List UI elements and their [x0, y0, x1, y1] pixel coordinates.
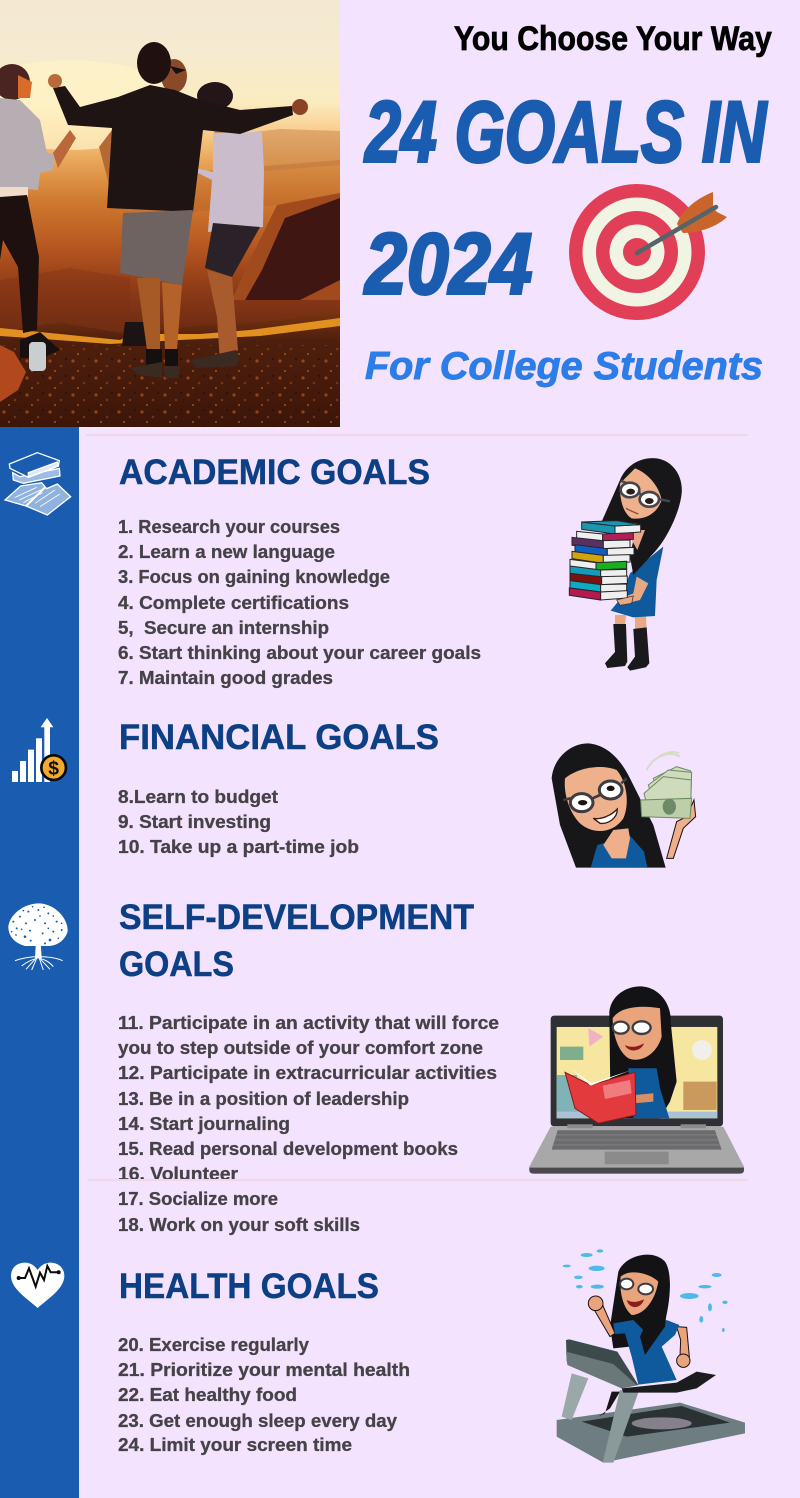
- divider: [86, 434, 748, 436]
- list: self-development goals: 18. Work on your soft skills: [118, 1215, 360, 1235]
- title block: [363, 19, 772, 388]
- list: academic goals: 3. Focus on gaining knowledge: [118, 567, 390, 587]
- list: self-development goals: you to step outside of your comfort zone: [118, 1038, 483, 1058]
- person: centre, dark jacket: [48, 42, 308, 378]
- panel: financial goals: [118, 718, 439, 857]
- arms: [593, 1305, 615, 1337]
- heading: self-development goals: SELF-DEVELOPMENT: [119, 898, 474, 937]
- orange bag: [0, 345, 26, 402]
- list: financial goals: [118, 787, 359, 857]
- list: financial goals: 8.Learn to budget: [118, 787, 278, 807]
- bitmoji: woman running on a treadmill: [557, 1249, 745, 1463]
- person: left, denim jacket: [0, 64, 76, 358]
- icon: tree with roots: [8, 903, 68, 970]
- fan of banknotes: [641, 767, 692, 818]
- bitmoji: woman holding money: [552, 743, 696, 868]
- list: health goals: 23. Get enough sleep every day: [118, 1411, 397, 1431]
- heading: self-development goals: [119, 898, 474, 984]
- hair: [610, 1255, 670, 1355]
- list: academic goals: [118, 517, 481, 688]
- list: academic goals: 2. Learn a new language: [118, 542, 335, 562]
- list: academic goals: 6. Start thinking about your career goals: [118, 643, 481, 663]
- list: academic goals: 4. Complete certifications: [118, 593, 349, 613]
- blue sidebar: [0, 427, 79, 1498]
- dress: [613, 1320, 679, 1385]
- list: self-development goals: 11. Participate in an activity that will force: [118, 1013, 499, 1033]
- person: behind centre: [99, 59, 187, 346]
- list: health goals: [118, 1335, 410, 1455]
- subtitle: For College Students: [365, 345, 763, 388]
- icon: rising bars with dollar coin: $: [48, 759, 59, 780]
- list: academic goals: 5, Secure an internship: [118, 618, 329, 638]
- list: health goals: 24. Limit your screen time: [118, 1435, 352, 1455]
- list: self-development goals: 16. Volunteer: [118, 1164, 238, 1184]
- bitmoji: woman reading on a laptop: [529, 986, 744, 1174]
- heading: financial goals: FINANCIAL GOALS: [119, 718, 439, 757]
- list: financial goals: 10. Take up a part-time job: [118, 837, 359, 857]
- arm: [617, 577, 648, 605]
- list: self-development goals: [118, 1013, 499, 1235]
- main title line 1: 24 GOALS IN: [363, 85, 768, 181]
- list: self-development goals: 14. Start journaling: [118, 1114, 290, 1134]
- icon: target with arrow: [569, 184, 727, 320]
- stack of books: [569, 521, 641, 600]
- treadmill base: [557, 1403, 745, 1463]
- panel: academic goals: [118, 453, 481, 688]
- list: self-development goals: 12. Participate in extracurricular activities: [118, 1063, 497, 1083]
- icon: heart with pulse: [11, 1263, 64, 1308]
- sweat drops: [563, 1249, 728, 1332]
- face: [620, 1272, 658, 1315]
- dress: [611, 547, 663, 617]
- main title line 2: 2024: [363, 217, 532, 313]
- heading: academic goals: ACADEMIC GOALS: [119, 453, 430, 492]
- legs and boots: [605, 615, 649, 671]
- hair: [602, 458, 682, 575]
- person: right, white shirt: [190, 82, 264, 368]
- hand: [617, 596, 633, 605]
- icon: rising bars with dollar coin: [12, 718, 66, 782]
- panel: health goals: [118, 1267, 410, 1455]
- list: health goals: 21. Prioritize your mental health: [118, 1360, 410, 1380]
- list: health goals: 20. Exercise regularly: [118, 1335, 309, 1355]
- photo: friends on a hill at sunset: [0, 0, 340, 427]
- list: self-development goals: 17. Socialize more: [118, 1189, 278, 1209]
- list: self-development goals: 15. Read personal development books: [118, 1139, 458, 1159]
- hair strand: [640, 1283, 670, 1355]
- icon: books: [5, 453, 71, 515]
- list: health goals: 22. Eat healthy food: [118, 1385, 297, 1405]
- heading: health goals: HEALTH GOALS: [119, 1267, 379, 1306]
- divider: [88, 1179, 748, 1181]
- heading: self-development goals: GOALS: [119, 945, 234, 984]
- face: [620, 468, 662, 519]
- list: financial goals: 9. Start investing: [118, 812, 271, 832]
- water bottle: [29, 342, 46, 371]
- panel: self-development goals: [118, 898, 499, 1235]
- bitmoji: woman carrying books: [569, 458, 682, 671]
- list: academic goals: 7. Maintain good grades: [118, 668, 333, 688]
- tagline: You Choose Your Way: [454, 19, 772, 57]
- list: academic goals: 1. Research your courses: [118, 517, 340, 537]
- list: self-development goals: 13. Be in a position of leadership: [118, 1089, 409, 1109]
- console: [566, 1339, 638, 1388]
